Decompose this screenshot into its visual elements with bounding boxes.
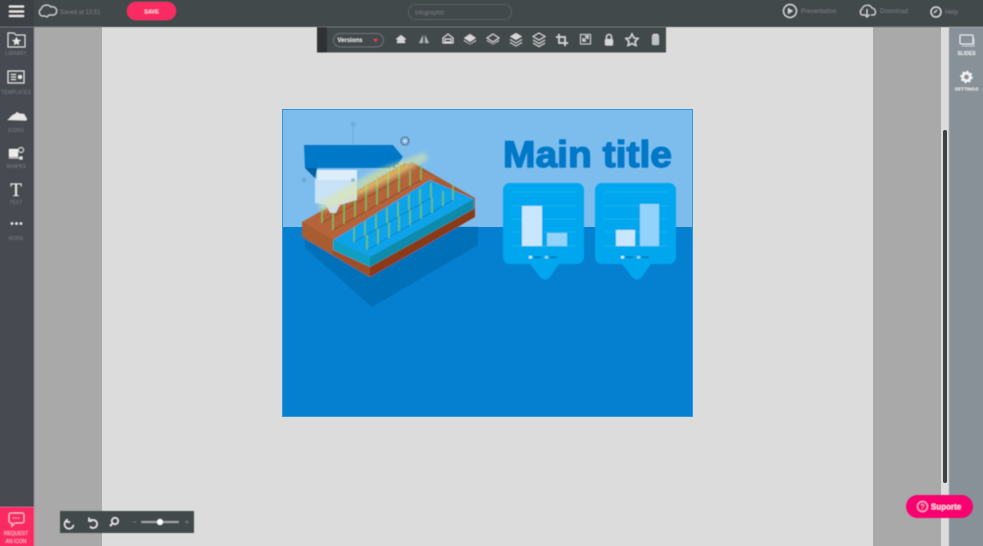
- library tool: LIBRARY: [5, 51, 27, 57]
- presentation button: [784, 4, 837, 18]
- download button: [860, 5, 909, 17]
- library tool: [5, 33, 27, 57]
- download button: Download: [880, 8, 909, 15]
- templates tool: [1, 71, 31, 96]
- scrollbar: [943, 130, 947, 483]
- text tool: T: [10, 180, 22, 201]
- icons tool: ICONS: [8, 128, 25, 134]
- panel: right sidebar: [949, 27, 983, 546]
- legend: left: [529, 256, 557, 258]
- presentation button: Presentation: [801, 8, 837, 15]
- tool icons: [396, 33, 659, 46]
- slides tool: SLIDES: [957, 51, 976, 57]
- slides tool: [957, 35, 976, 57]
- plant tops: [318, 152, 428, 212]
- icons tool: [7, 112, 27, 134]
- panel: infographic canvas: [282, 109, 693, 417]
- settings tool: [954, 72, 979, 92]
- support button: ?: [921, 504, 925, 511]
- support button: Suporte: [931, 502, 962, 512]
- panel: left chart card: [503, 183, 584, 280]
- bar chart: left: [522, 206, 567, 246]
- shapes tool: [6, 148, 27, 170]
- settings tool: SETTINGS: [954, 86, 979, 92]
- illustration: isometric rice field: [302, 162, 478, 307]
- icon: move cursor: [401, 137, 409, 145]
- legend: right: [621, 256, 649, 258]
- file name field: [408, 4, 512, 20]
- versions dropdown: [334, 34, 384, 47]
- callout: selected white box: [315, 170, 357, 213]
- banner: dark blue ribbon: [304, 145, 403, 178]
- selection handles: [302, 122, 356, 182]
- icon: saved cloud: [39, 5, 57, 17]
- help button: Help: [945, 9, 958, 16]
- text tool: TEXT: [10, 200, 22, 206]
- title: Main title: [503, 134, 672, 175]
- file name field: infographic: [415, 10, 444, 16]
- save button: SAVE: [144, 10, 159, 16]
- more tool: MORE: [8, 236, 24, 242]
- toolbar: zoom controls: [60, 511, 194, 533]
- top bar: [0, 0, 983, 27]
- more tool: [8, 222, 24, 242]
- request an icon button: [0, 507, 34, 546]
- support button: [906, 495, 973, 518]
- icon: menu: [9, 6, 24, 17]
- versions dropdown: Versions: [338, 38, 363, 44]
- templates tool: TEMPLATES: [1, 90, 31, 96]
- request an icon button: AN ICON: [6, 539, 27, 545]
- panel: left sidebar: [0, 27, 34, 507]
- help button: [931, 7, 958, 17]
- panel: right chart card: [595, 183, 676, 280]
- plants: [322, 164, 453, 250]
- bar chart: right: [616, 204, 659, 246]
- saved status: Saved at 13:51: [60, 10, 101, 16]
- shapes tool: SHAPES: [6, 164, 27, 170]
- save button: [127, 2, 176, 20]
- request an icon button: REQUEST: [4, 531, 28, 537]
- toolbar: object tools: [317, 27, 666, 52]
